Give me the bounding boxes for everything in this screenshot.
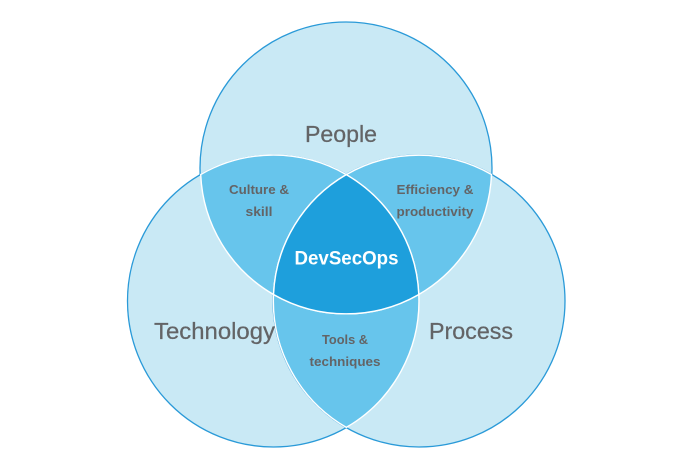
label: technology: Technology xyxy=(154,318,275,344)
circle: process xyxy=(273,155,565,447)
label: culture and skill xyxy=(229,182,289,219)
label: culture and skill: Culture & xyxy=(229,182,289,197)
label: tools and techniques xyxy=(310,332,380,369)
overlap: efficiency and productivity xyxy=(346,155,492,294)
label: efficiency and productivity: Efficiency & xyxy=(396,182,474,197)
overlap: devsecops centre xyxy=(274,175,419,314)
label: tools and techniques: Tools & xyxy=(322,332,368,347)
overlap: culture and skill xyxy=(201,155,346,294)
label: culture and skill: skill xyxy=(246,204,272,219)
label: efficiency and productivity xyxy=(396,182,474,219)
circle: technology xyxy=(128,155,420,447)
label: tools and techniques: techniques xyxy=(310,354,380,369)
label: efficiency and productivity: productivity xyxy=(396,204,474,219)
label: devsecops: DevSecOps xyxy=(294,248,398,270)
label: process: Process xyxy=(429,318,513,344)
circle: people xyxy=(200,22,492,314)
overlap: tools and techniques xyxy=(273,294,419,427)
label: people: People xyxy=(305,121,377,147)
